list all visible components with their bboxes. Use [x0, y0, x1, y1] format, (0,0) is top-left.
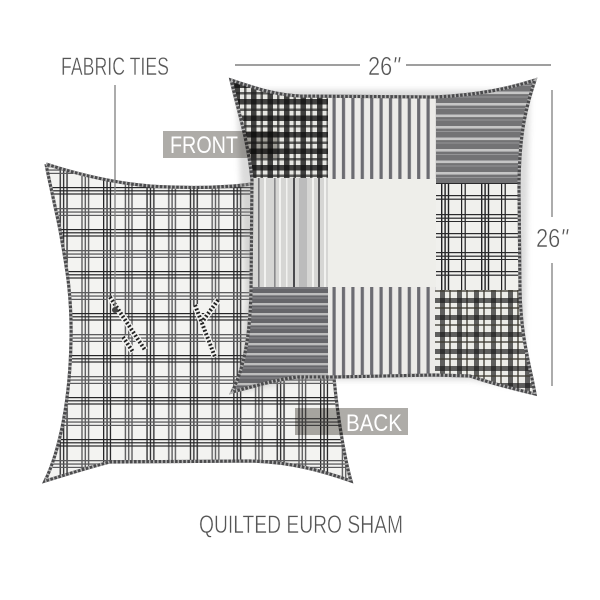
icon: fabric tie right — [195, 300, 218, 357]
patch: ticking stripes bottom centre — [328, 287, 435, 382]
label box: front: FRONT — [170, 132, 238, 159]
label: fabric ties: FABRIC TIES — [61, 53, 169, 81]
caption: QUILTED EURO SHAM — [199, 511, 403, 539]
patch: horizontal stripes top right — [436, 82, 532, 183]
front pillow shadow — [236, 90, 530, 392]
label box: back: BACK — [346, 410, 402, 437]
leader line: fabric ties — [114, 85, 116, 307]
label box: front — [163, 131, 277, 159]
icon: fabric tie left — [110, 297, 145, 352]
patch: horizontal stripes bottom left — [235, 287, 328, 390]
dimension: height: 26" — [536, 223, 569, 253]
label box: back — [295, 408, 408, 437]
back pillow — [45, 164, 351, 481]
front pillow — [225, 75, 541, 398]
patch: solid cream centre — [328, 179, 436, 287]
patch: ticking stripes top centre — [328, 90, 436, 180]
patch: dark plaid top left — [233, 82, 328, 178]
patch: light stripes middle left — [245, 178, 328, 287]
dimension: width: 26" — [368, 51, 401, 81]
patch: plaid middle right — [436, 183, 526, 290]
patch: dark plaid bottom right — [435, 290, 533, 392]
